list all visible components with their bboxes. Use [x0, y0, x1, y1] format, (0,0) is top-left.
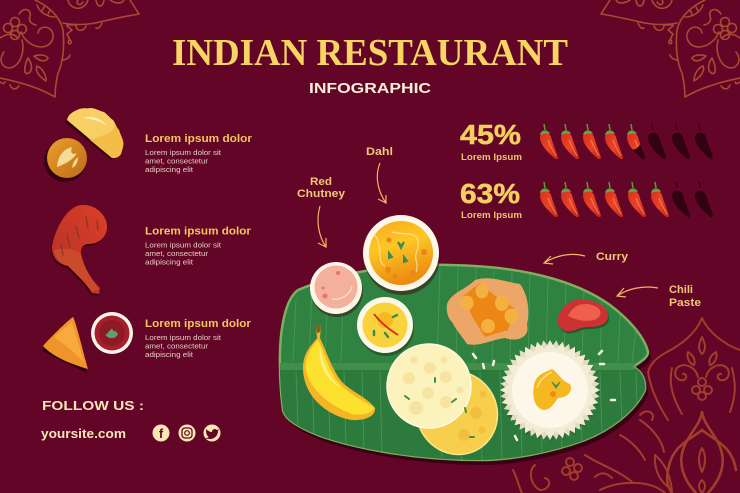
text block 2: amet, consectetur [145, 249, 209, 258]
text block 1: amet, consectetur [145, 156, 209, 166]
arrow: Dahl [377, 163, 386, 203]
arrow: Chili Paste [617, 287, 658, 297]
dish: yellow curry bowl [357, 297, 414, 356]
banana leaf plate [280, 265, 651, 467]
text block 3 [145, 318, 252, 359]
label: Red Chutney [297, 176, 346, 200]
icon: pastry and coin [44, 108, 123, 182]
label: Red Chutney: Chutney [297, 188, 346, 200]
label: Red Chutney: Red [310, 176, 332, 188]
text block 2: Lorem ipsum dolor sit [145, 240, 221, 250]
stat: 63% [460, 178, 522, 221]
mandala: top right corner [601, 0, 740, 97]
label: Chili Paste [669, 284, 701, 309]
text block 3: Lorem ipsum dolor sit [145, 333, 221, 342]
arrow: Red Chutney [318, 206, 326, 247]
title: INDIAN RESTAURANT [172, 32, 568, 74]
subtitle: INFOGRAPHIC [309, 80, 431, 97]
dish: curry [447, 278, 528, 345]
text block 1: Lorem ipsum dolor [145, 133, 253, 145]
stat: 63%: 63% [460, 178, 520, 209]
text block 2: adipiscing elit [145, 258, 193, 266]
stat: 45% [460, 119, 522, 163]
icon: samosa and chutney bowl [42, 312, 133, 373]
text block 2 [145, 226, 252, 266]
website: yoursite.com [41, 426, 126, 441]
dish: rice [473, 334, 615, 446]
text block 1: Lorem ipsum dolor sit [145, 148, 221, 157]
text block 1 [145, 133, 253, 174]
stat: 45%: Lorem Ipsum [461, 152, 522, 163]
dish: flatbreads [387, 344, 513, 469]
follow us: FOLLOW US : [42, 398, 144, 413]
label: Chili Paste: Paste [669, 297, 701, 309]
stat: 63%: Lorem Ipsum [461, 210, 522, 221]
mandala: top left corner [0, 0, 139, 97]
text block 2: Lorem ipsum dolor [145, 226, 252, 238]
dish: banana [303, 325, 375, 420]
dish: red chutney bowl [310, 262, 363, 317]
text block 1: adipiscing elit [145, 165, 193, 174]
chili row 63% [540, 182, 713, 217]
label: Chili Paste: Chili [669, 284, 693, 296]
social icons [152, 424, 220, 442]
mandala: bottom right corner [513, 318, 740, 493]
dish: chili paste [558, 299, 609, 333]
social icons: f [159, 426, 164, 441]
label: Curry: Curry [596, 251, 629, 263]
icon: chicken leg [51, 205, 107, 296]
text block 3: amet, consectetur [145, 342, 209, 350]
dish: dahl bowl [363, 215, 440, 295]
chili row 45% [540, 124, 713, 159]
arrow: Curry [544, 254, 585, 264]
stat: 45%: 45% [460, 119, 521, 150]
text block 3: adipiscing elit [145, 350, 193, 359]
text block 3: Lorem ipsum dolor [145, 318, 252, 330]
label: Dahl: Dahl [366, 146, 393, 158]
